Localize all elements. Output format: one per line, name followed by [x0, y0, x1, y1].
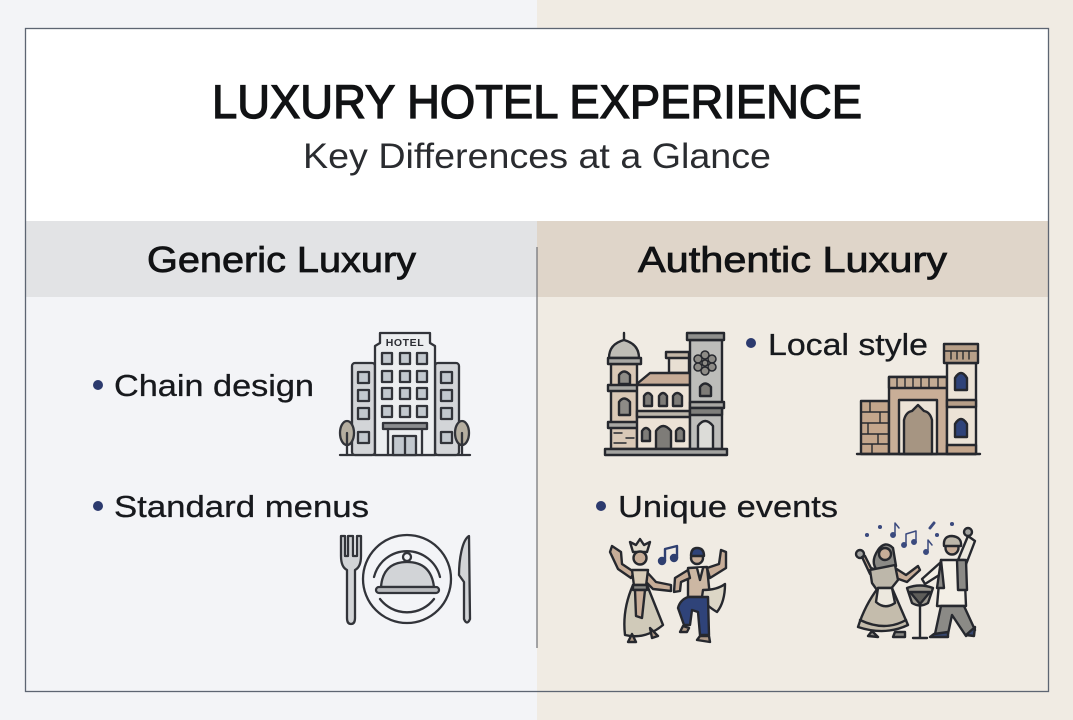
heading band: Generic Luxury: [26, 221, 537, 297]
subtitle: Key Differences at a Glance: [303, 137, 771, 176]
icon: heritage palace: [605, 333, 727, 455]
heading band: Authentic Luxury: [537, 221, 1048, 297]
heading: Generic Luxury: Generic Luxury: [147, 239, 416, 280]
icon: hotel building: [340, 333, 470, 455]
heading: Authentic Luxury: Authentic Luxury: [638, 239, 947, 280]
panel: header: [26, 29, 1048, 221]
panel: generic luxury column: [26, 221, 537, 624]
icon: hotel building: HOTEL: [386, 337, 424, 349]
icon: plate with fork and knife: [341, 535, 470, 624]
panel: authentic luxury column: [537, 221, 1048, 642]
bullet: Chain design: Chain design: [114, 368, 314, 403]
icon: arched gateway: [857, 344, 980, 454]
icon: traditional dancers: [610, 539, 726, 642]
icon: musicians: [856, 523, 975, 638]
bullet: Local style: Local style: [768, 327, 928, 362]
title: LUXURY HOTEL EXPERIENCE: [212, 75, 862, 128]
bullet: Standard menus: Standard menus: [114, 489, 369, 524]
bullet: Unique events: Unique events: [618, 489, 838, 524]
